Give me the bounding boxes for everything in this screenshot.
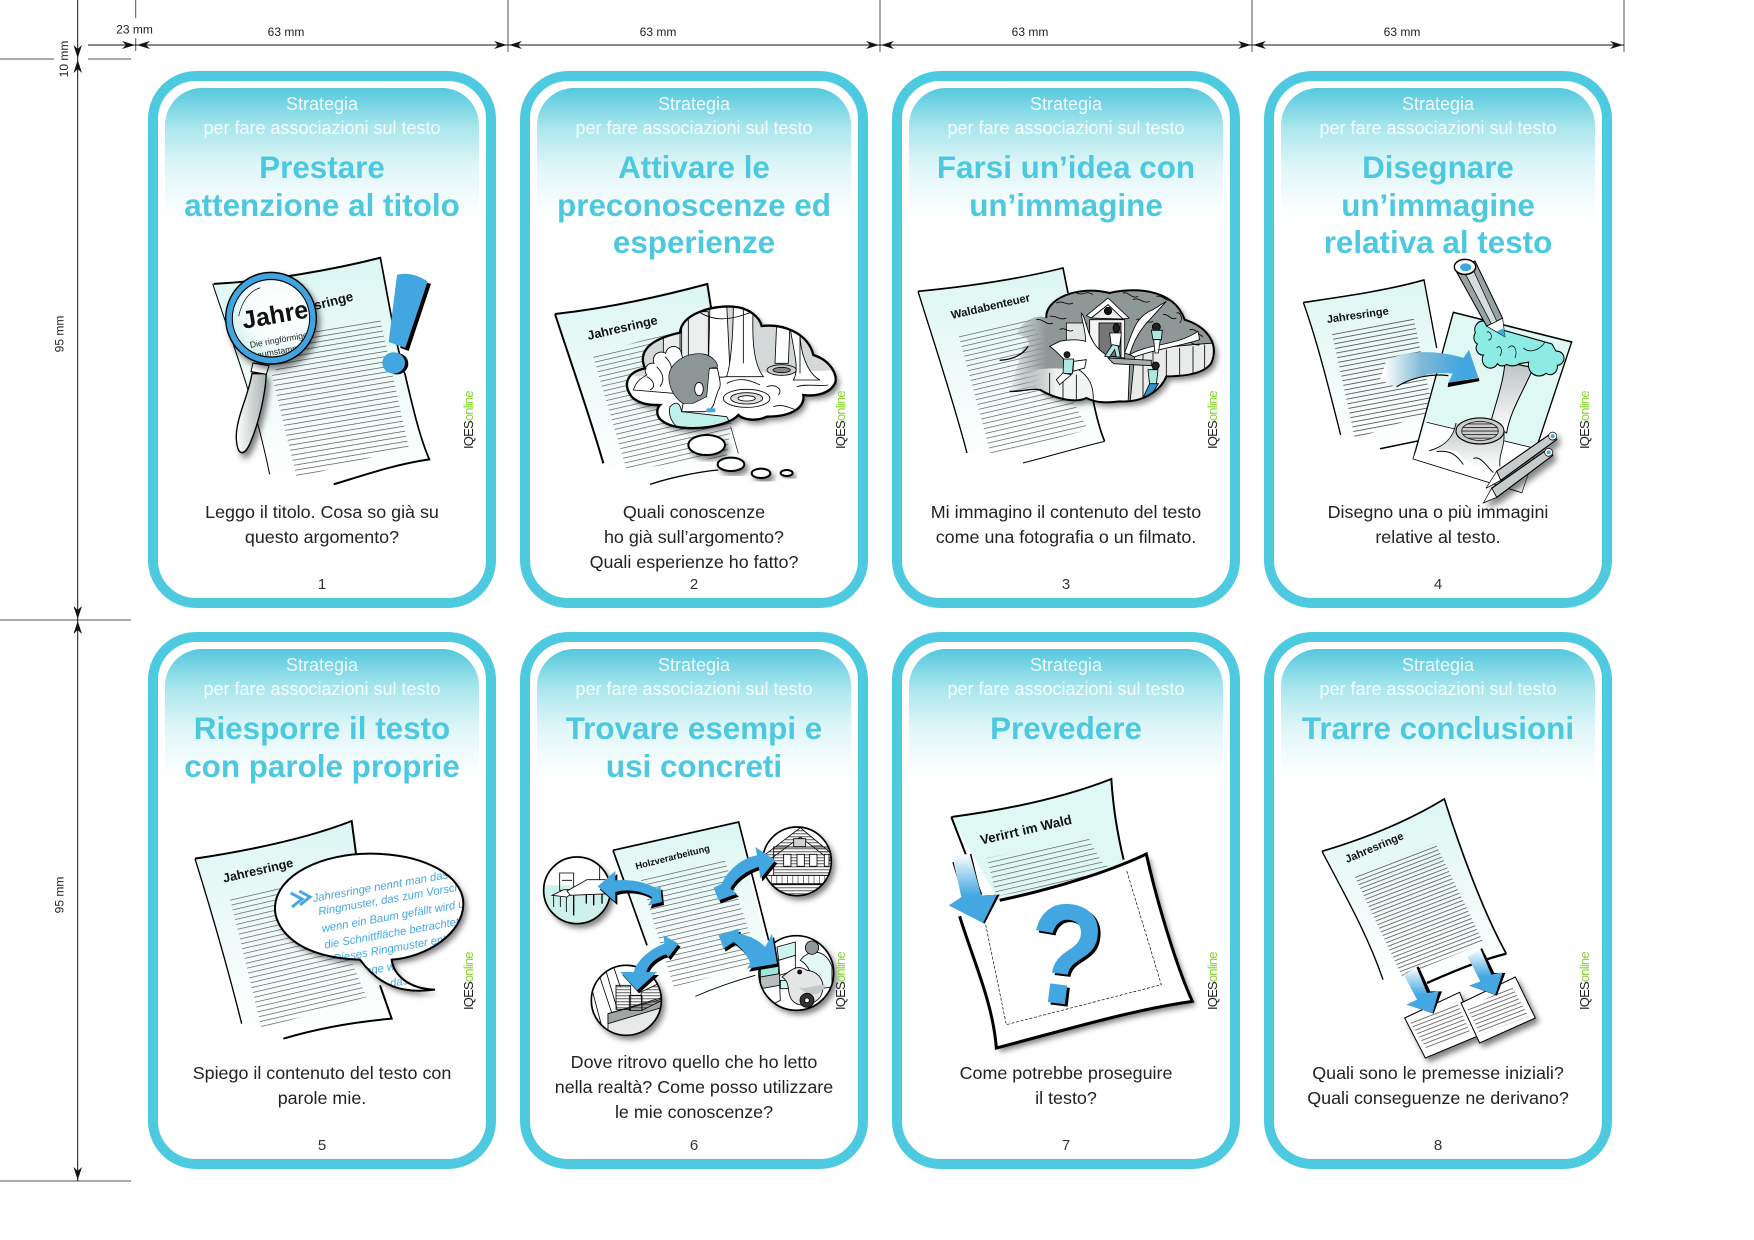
card number: 1 (318, 576, 326, 593)
header text: per fare associazioni sul testo (575, 678, 813, 698)
illustration: text linked to four real-world pictures (542, 821, 842, 1044)
card frame (148, 632, 496, 1169)
illustration: text with speech bubble: Jahresringe nennt man das Jahr (311, 864, 475, 905)
card title (184, 150, 460, 223)
logo: IQESonline (833, 952, 848, 1010)
dimension lines and measurements: 63 mm (640, 25, 676, 39)
card 8 (1264, 632, 1612, 1169)
header text: per fare associazioni sul testo (575, 118, 813, 138)
header text (947, 655, 1185, 699)
header text: per fare associazioni sul testo (203, 678, 441, 698)
header text: per fare associazioni sul testo (947, 118, 1185, 138)
illustration: reader with thought cloud of forest (554, 282, 843, 485)
card text: Quali conoscenze (623, 502, 765, 522)
card text: Leggo il titolo. Cosa so già su (205, 502, 439, 522)
card title: Prestare (259, 150, 385, 185)
card title: un’immagine (969, 188, 1163, 223)
card text (960, 1063, 1172, 1108)
card number: 2 (690, 576, 698, 593)
header text: Strategia (658, 94, 730, 114)
dimension lines and measurements: 10 mm (57, 41, 71, 77)
card text: il testo? (1035, 1088, 1097, 1108)
illustration: magnifier over text with exclamation mark: Baumstammes (250, 341, 310, 361)
card title: Trovare esempi e (566, 711, 822, 746)
card text: Come potrebbe proseguire (960, 1063, 1172, 1083)
card text: Spiego il contenuto del testo con (193, 1063, 451, 1083)
card title: relativa al testo (1324, 225, 1552, 260)
dimension lines and measurements: 95 mm (52, 877, 66, 913)
card text (1328, 502, 1548, 547)
dimension lines and measurements: 23 mm (116, 22, 153, 36)
card frame (1264, 632, 1612, 1169)
illustration: text turning into a tree-house picture (917, 267, 1221, 464)
header text: per fare associazioni sul testo (947, 678, 1185, 698)
card title (184, 711, 460, 784)
illustration: text and drawing of a tree with pencils: Jahresringe (1326, 305, 1389, 326)
header text (203, 94, 441, 138)
logo: IQESonline (1577, 952, 1592, 1010)
card title: Riesporre il testo (194, 711, 450, 746)
header text: per fare associazioni sul testo (1319, 118, 1557, 138)
header gradient (165, 88, 479, 218)
logo: IQESonline (1205, 952, 1220, 1010)
illustration: magnifier over text with exclamation mark: Jahre (240, 296, 310, 335)
illustration: text with speech bubble: Jahresringe (222, 855, 295, 885)
card title: Farsi un’idea con (937, 150, 1195, 185)
card title: esperienze (613, 225, 775, 260)
header text: Strategia (286, 655, 358, 675)
card title: usi concreti (606, 749, 782, 784)
card text (555, 1052, 833, 1122)
header text (1319, 94, 1557, 138)
header text (203, 655, 441, 699)
card text: le mie conoscenze? (615, 1102, 773, 1122)
dimension lines and measurements: 95 mm (52, 316, 66, 352)
header gradient (909, 88, 1223, 218)
card text: come una fotografia o un filmato. (936, 527, 1196, 547)
illustration: reader with thought cloud of forest: Jahresringe (586, 313, 659, 343)
dimension lines and measurements: 63 mm (1384, 25, 1420, 39)
header text (575, 94, 813, 138)
header text: Strategia (1402, 94, 1474, 114)
header text (575, 655, 813, 699)
card number: 3 (1062, 576, 1070, 593)
illustration: text with speech bubble: Dieses Ringmuster entsteht (332, 929, 472, 965)
card title (937, 150, 1195, 223)
card title: attenzione al titolo (184, 188, 460, 223)
illustration: text with speech bubble: wenn ein Baum gefällt wird und (321, 896, 479, 935)
card title: con parole proprie (184, 749, 460, 784)
illustration: text with speech bubble: die Schnittfläche betrachtet. (323, 915, 463, 951)
card 2 (520, 71, 868, 608)
card frame (892, 632, 1240, 1169)
card 7 (892, 632, 1240, 1169)
card title (557, 150, 831, 260)
illustration: magnifier over text with exclamation mark (212, 256, 431, 486)
card number: 5 (318, 1137, 326, 1154)
card text: ho già sull’argomento? (604, 527, 784, 547)
illustration: magnifier over text with exclamation mark: Die ringförmigen S (249, 328, 321, 350)
card frame (892, 71, 1240, 608)
illustration: text with two arrows to smaller notes: Jahresringe (1343, 831, 1405, 866)
illustration: text with two arrows to smaller notes (1321, 798, 1542, 1066)
card number: 6 (690, 1137, 698, 1154)
card text (193, 1063, 451, 1108)
dimension lines and measurements: 63 mm (1012, 25, 1048, 39)
header gradient (165, 649, 479, 779)
card number: 8 (1434, 1137, 1442, 1154)
illustration: text with speech bubble: inge wachsen (362, 954, 432, 978)
illustration: text with speech bubble: das (389, 975, 410, 990)
card title (1324, 150, 1552, 260)
illustration: text sliding into envelope with question mark (949, 778, 1198, 1055)
illustration: text with speech bubble: Ringmuster, das zum Vorschein (317, 878, 477, 918)
dimension lines and measurements: 63 mm (268, 25, 304, 39)
card title: Disegnare (1362, 150, 1514, 185)
logo: IQESonline (461, 952, 476, 1010)
logo: IQESonline (833, 391, 848, 449)
card frame (520, 71, 868, 608)
card 1 (148, 71, 496, 608)
card frame (148, 71, 496, 608)
card text (590, 502, 798, 572)
header text: Strategia (286, 94, 358, 114)
header gradient (537, 88, 851, 218)
card title (566, 711, 822, 784)
logo: IQESonline (1205, 391, 1220, 449)
logo: IQESonline (1577, 391, 1592, 449)
illustration: text sliding into envelope with question mark: ? (1021, 874, 1114, 1042)
illustration: text turning into a tree-house picture: Waldabenteuer (950, 292, 1032, 322)
card text: Dove ritrovo quello che ho letto (571, 1052, 817, 1072)
illustration: text with speech bubble (194, 820, 470, 1040)
card 3 (892, 71, 1240, 608)
header gradient (537, 649, 851, 779)
logo: IQESonline (461, 391, 476, 449)
header text (947, 94, 1185, 138)
card title: Prevedere (990, 711, 1142, 746)
card 6 (520, 632, 868, 1169)
card text: relative al testo. (1375, 527, 1501, 547)
illustration: text and drawing of a tree with pencils (1302, 258, 1572, 512)
card title: Attivare le (618, 150, 770, 185)
card number: 7 (1062, 1137, 1070, 1154)
card text: nella realtà? Come posso utilizzare (555, 1077, 833, 1097)
card title: preconoscenze ed (557, 188, 831, 223)
card 4 (1264, 71, 1612, 608)
card text (1307, 1063, 1569, 1108)
header text: Strategia (1402, 655, 1474, 675)
card text (931, 502, 1201, 547)
header text: per fare associazioni sul testo (1319, 678, 1557, 698)
header text (1319, 655, 1557, 699)
card text: parole mie. (278, 1088, 366, 1108)
card 5 (148, 632, 496, 1169)
header text: Strategia (1030, 94, 1102, 114)
header gradient (909, 649, 1223, 779)
card title: un’immagine (1341, 188, 1535, 223)
card text: Quali conseguenze ne derivano? (1307, 1088, 1569, 1108)
illustration: text linked to four real-world pictures: Holzverarbeitung (634, 843, 711, 871)
card title: Trarre conclusioni (1302, 711, 1574, 746)
card text: Quali esperienze ho fatto? (590, 552, 798, 572)
header text: Strategia (658, 655, 730, 675)
card frame (1264, 71, 1612, 608)
illustration: text sliding into envelope with question mark: ? (1019, 872, 1112, 1039)
card text: questo argomento? (245, 527, 399, 547)
card text: Quali sono le premesse iniziali? (1312, 1063, 1564, 1083)
card number: 4 (1434, 576, 1442, 593)
header gradient (1281, 649, 1595, 779)
header text: Strategia (1030, 655, 1102, 675)
header text: per fare associazioni sul testo (203, 118, 441, 138)
card text (205, 502, 439, 547)
illustration: text sliding into envelope with question mark: Verirrt im Wald (979, 812, 1074, 848)
header gradient (1281, 88, 1595, 218)
illustration: magnifier over text with exclamation mark: Jahresringe (277, 289, 354, 322)
card text: Disegno una o più immagini (1328, 502, 1548, 522)
card frame (520, 632, 868, 1169)
card text: Mi immagino il contenuto del testo (931, 502, 1201, 522)
